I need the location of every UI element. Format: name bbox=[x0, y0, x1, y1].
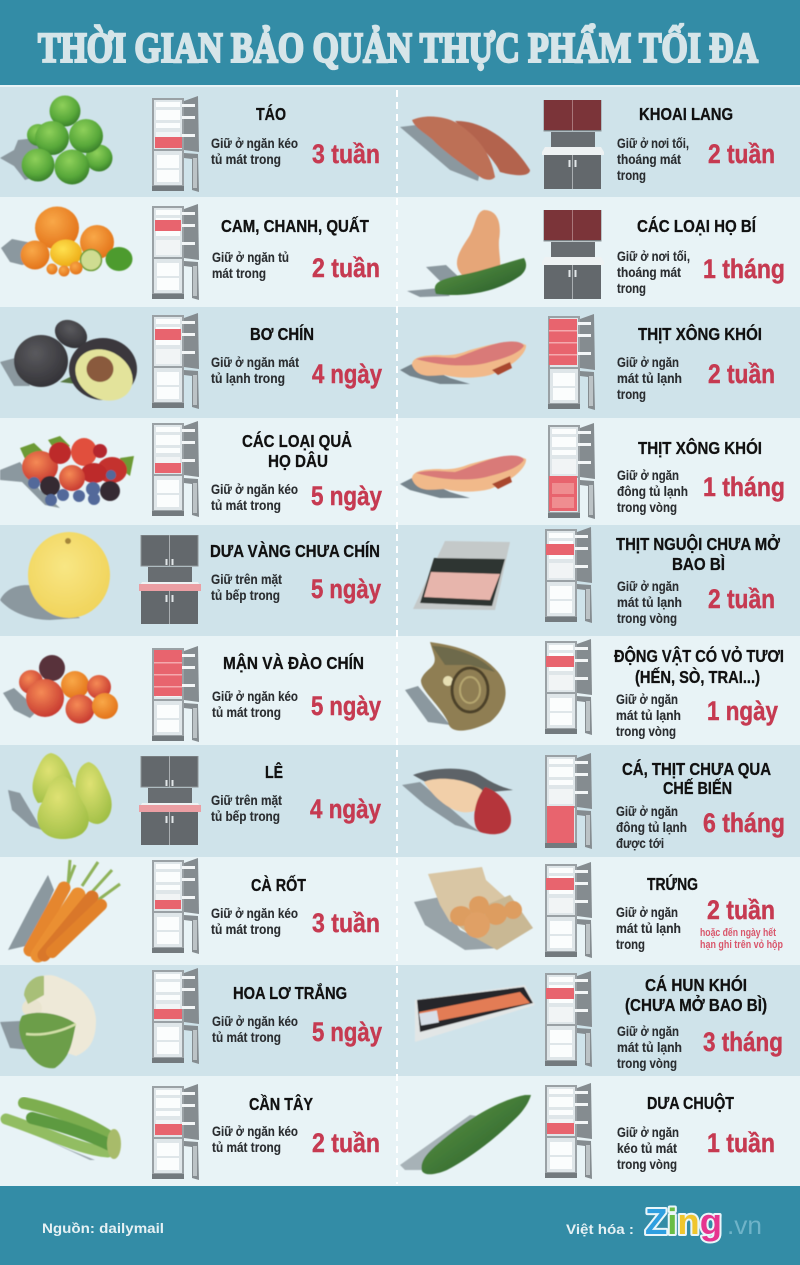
fridge bbox=[152, 96, 199, 192]
cabinet bbox=[139, 535, 201, 624]
cabinet bbox=[542, 210, 604, 299]
storage note: Giữ ở ngăn bbox=[616, 692, 678, 707]
row: cần tây bbox=[6, 1084, 380, 1180]
storage note: mát tủ lạnh bbox=[617, 1040, 682, 1055]
storage note: Giữ ở nơi tối, bbox=[617, 249, 690, 264]
fridge bbox=[152, 1084, 199, 1180]
storage note: Giữ ở ngăn kéo bbox=[211, 482, 298, 497]
storage note: Giữ ở ngăn bbox=[617, 1024, 679, 1039]
storage note: tủ mát trong bbox=[212, 1030, 281, 1045]
icon: melon bbox=[0, 532, 110, 620]
row: mận và đào chín bbox=[3, 646, 381, 742]
storage note: thoáng mát bbox=[617, 265, 681, 280]
duration: 6 tháng bbox=[703, 808, 785, 838]
fridge bbox=[545, 971, 592, 1067]
icon: cucumber bbox=[400, 1095, 531, 1174]
icon: avocados bbox=[0, 314, 142, 411]
storage note: trong vòng bbox=[617, 1056, 677, 1071]
cabinet bbox=[139, 756, 201, 845]
header band bbox=[0, 0, 800, 85]
heading: CÁC LOẠI QUẢ bbox=[242, 430, 352, 451]
storage note bbox=[211, 355, 299, 386]
duration: 3 tuần bbox=[312, 908, 380, 938]
storage note: mát tủ lạnh bbox=[616, 708, 681, 723]
row: các loại họ bí bbox=[407, 210, 785, 299]
heading: BƠ CHÍN bbox=[250, 323, 314, 344]
fridge bbox=[152, 204, 199, 300]
storage note: Giữ ở ngăn mát bbox=[211, 355, 299, 370]
row: các loại quả họ dâu bbox=[0, 421, 382, 517]
row: táo bbox=[0, 96, 380, 192]
fridge bbox=[545, 639, 592, 735]
storage note bbox=[617, 249, 690, 296]
storage note: Giữ ở ngăn kéo bbox=[211, 906, 298, 921]
heading: CÁC LOẠI HỌ BÍ bbox=[637, 215, 757, 236]
storage note: Giữ ở ngăn bbox=[616, 804, 678, 819]
heading: TÁO bbox=[256, 103, 286, 124]
duration: 2 tuần bbox=[708, 139, 775, 169]
storage note: trong bbox=[616, 937, 645, 952]
heading: CÁ HUN KHÓI bbox=[645, 974, 747, 995]
icon: squash and zucchini bbox=[407, 210, 526, 297]
storage note: Giữ ở ngăn kéo bbox=[211, 136, 298, 151]
fridge bbox=[545, 753, 592, 849]
duration: 1 tuần bbox=[707, 1128, 775, 1158]
row: cà rốt bbox=[8, 858, 380, 955]
icon: celery bbox=[6, 1103, 121, 1160]
storage note: Giữ ở ngăn bbox=[617, 355, 679, 370]
storage note bbox=[617, 136, 689, 183]
fridge bbox=[152, 968, 199, 1064]
icon: fish and meat bbox=[402, 769, 513, 834]
storage note: Giữ trên mặt bbox=[211, 793, 282, 808]
icon: oyster bbox=[405, 642, 506, 731]
fridge bbox=[152, 421, 199, 517]
storage note: Giữ ở ngăn kéo bbox=[212, 689, 298, 704]
storage note: được tới bbox=[616, 836, 664, 851]
storage note: Giữ ở ngăn kéo bbox=[212, 1014, 298, 1029]
duration: 5 ngày bbox=[311, 574, 381, 604]
heading: HOA LƠ TRẮNG bbox=[233, 982, 347, 1003]
row: thịt xông khói (ngăn mát) bbox=[400, 314, 775, 410]
heading bbox=[242, 430, 352, 471]
icon: pears bbox=[8, 753, 112, 839]
duration: 5 ngày bbox=[312, 1017, 382, 1047]
heading: DƯA CHUỘT bbox=[647, 1092, 734, 1113]
storage note: mát trong bbox=[212, 266, 266, 281]
icon: apples bbox=[0, 96, 112, 184]
storage note: trong vòng bbox=[617, 1157, 677, 1172]
icon: sweet potatoes bbox=[400, 116, 530, 181]
row: cá, thịt bbox=[402, 753, 785, 851]
duration: 2 tuần bbox=[312, 253, 380, 283]
icon: cauliflower bbox=[0, 975, 96, 1068]
duration: 2 tuần bbox=[312, 1128, 380, 1158]
storage note bbox=[616, 905, 681, 952]
storage note bbox=[211, 482, 298, 513]
storage note: đông tủ lạnh bbox=[617, 484, 688, 499]
logo: zing.vn: Zing bbox=[645, 1201, 722, 1242]
row: động vật có vỏ bbox=[405, 639, 784, 739]
icon: bacon bbox=[400, 342, 526, 384]
duration: 1 ngày bbox=[707, 696, 778, 726]
row: trứng bbox=[414, 862, 783, 958]
storage note: mát tủ lạnh bbox=[616, 921, 681, 936]
storage note: Giữ ở nơi tối, bbox=[617, 136, 689, 151]
storage note: Giữ ở ngăn kéo bbox=[212, 1124, 298, 1139]
duration: 5 ngày bbox=[311, 481, 382, 511]
heading: MẬN VÀ ĐÀO CHÍN bbox=[223, 652, 364, 673]
fridge bbox=[152, 313, 199, 409]
storage note: Giữ ở ngăn bbox=[617, 579, 679, 594]
heading bbox=[625, 974, 767, 1015]
row: thịt xông khói (ngăn đông) bbox=[400, 423, 785, 519]
storage note bbox=[212, 1124, 298, 1155]
storage note bbox=[617, 579, 682, 626]
heading: THỊT XÔNG KHÓI bbox=[638, 437, 762, 458]
heading: TRỨNG bbox=[647, 873, 698, 894]
row: lê bbox=[8, 753, 381, 845]
storage note: tủ mát trong bbox=[211, 498, 281, 513]
storage note: tủ mát trong bbox=[212, 705, 281, 720]
storage note: mát tủ lạnh bbox=[617, 371, 682, 386]
storage note bbox=[616, 804, 687, 851]
fridge bbox=[152, 646, 199, 742]
heading: KHOAI LANG bbox=[639, 104, 733, 124]
heading: BAO BÌ bbox=[672, 553, 725, 574]
duration: 4 ngày bbox=[310, 794, 381, 824]
storage note: tủ mát trong bbox=[212, 1140, 281, 1155]
row: cá hun khói bbox=[415, 971, 783, 1071]
storage note bbox=[212, 1014, 298, 1045]
cabinet bbox=[542, 100, 604, 189]
storage note: Giữ ở ngăn tủ bbox=[212, 250, 289, 265]
row: bơ chín bbox=[0, 313, 382, 411]
storage note: trong vòng bbox=[617, 500, 677, 515]
storage note bbox=[617, 1024, 682, 1071]
fridge bbox=[545, 862, 592, 958]
storage note: Giữ ở ngăn bbox=[617, 468, 679, 483]
icon: citrus bbox=[1, 206, 132, 276]
storage note: tủ bếp trong bbox=[211, 809, 280, 824]
storage note: tủ lạnh trong bbox=[211, 371, 285, 386]
icon: berries bbox=[0, 436, 134, 508]
logo: zing.vn: .vn bbox=[727, 1212, 762, 1240]
heading: DƯA VÀNG CHƯA CHÍN bbox=[210, 540, 380, 561]
heading bbox=[616, 533, 780, 574]
heading: THỊT XÔNG KHÓI bbox=[638, 323, 762, 344]
storage note bbox=[212, 689, 298, 720]
footer band bbox=[0, 1186, 800, 1265]
heading: CẦN TÂY bbox=[249, 1093, 313, 1114]
duration: 3 tháng bbox=[703, 1027, 783, 1057]
storage note bbox=[617, 355, 682, 402]
icon: ham package bbox=[413, 541, 510, 610]
heading: (CHƯA MỞ BAO BÌ) bbox=[625, 994, 767, 1015]
storage note bbox=[212, 250, 289, 281]
storage note: thoáng mát bbox=[617, 152, 681, 167]
storage note bbox=[211, 136, 298, 167]
duration: 3 tuần bbox=[312, 139, 380, 169]
row: khoai lang bbox=[400, 100, 775, 189]
row: dưa vàng bbox=[0, 532, 381, 624]
duration: 5 ngày bbox=[311, 691, 381, 721]
heading: CÀ RỐT bbox=[251, 874, 306, 895]
fridge bbox=[545, 1083, 592, 1179]
duration: 1 tháng bbox=[703, 254, 785, 284]
storage note: kéo tủ mát bbox=[617, 1141, 677, 1156]
storage note: tủ mát trong bbox=[211, 152, 281, 167]
row: thịt nguội bbox=[413, 527, 780, 626]
storage note bbox=[211, 572, 282, 603]
icon: eggs in carton bbox=[414, 867, 533, 950]
storage note: trong bbox=[617, 281, 646, 296]
translator label: Việt hóa : bbox=[566, 1221, 634, 1237]
storage note: Giữ ở ngăn bbox=[617, 1125, 679, 1140]
storage note: trong vòng bbox=[616, 724, 676, 739]
heading bbox=[614, 645, 784, 687]
storage note: Giữ ở ngăn bbox=[616, 905, 678, 920]
storage note: trong vòng bbox=[617, 611, 677, 626]
heading: CHẾ BIẾN bbox=[663, 777, 732, 798]
heading: CAM, CHANH, QUẤT bbox=[221, 215, 369, 236]
source: Nguồn: dailymail bbox=[42, 1220, 164, 1236]
expiry note bbox=[700, 927, 783, 951]
expiry note: hoặc đến ngày hết bbox=[700, 927, 776, 939]
heading: CÁ, THỊT CHƯA QUA bbox=[622, 758, 771, 779]
row: hoa lơ trắng bbox=[0, 968, 382, 1068]
storage note: tủ mát trong bbox=[211, 922, 281, 937]
storage note: tủ bếp trong bbox=[211, 588, 280, 603]
duration: 2 tuần bbox=[708, 584, 775, 614]
fridge bbox=[548, 314, 595, 410]
duration: 2 tuần bbox=[708, 359, 775, 389]
icon: smoked salmon pack bbox=[415, 985, 535, 1042]
fridge bbox=[548, 423, 595, 519]
storage note bbox=[211, 906, 298, 937]
row: cam, chanh, quất bbox=[1, 204, 380, 300]
icon: bacon bbox=[400, 456, 526, 498]
storage note: trong bbox=[617, 168, 646, 183]
heading bbox=[622, 758, 771, 798]
heading: (HẾN, SÒ, TRAI...) bbox=[635, 666, 760, 687]
storage note: mát tủ lạnh bbox=[617, 595, 682, 610]
storage note: đông tủ lạnh bbox=[616, 820, 687, 835]
storage note bbox=[616, 692, 681, 739]
fridge bbox=[152, 858, 199, 954]
duration: 1 tháng bbox=[703, 472, 785, 502]
icon: plums and peaches bbox=[3, 655, 118, 724]
row: dưa chuột bbox=[400, 1083, 775, 1179]
duration: 4 ngày bbox=[312, 359, 382, 389]
fridge bbox=[545, 527, 592, 623]
storage note bbox=[617, 468, 688, 515]
duration: 2 tuần bbox=[707, 895, 775, 925]
storage note: trong bbox=[617, 387, 646, 402]
storage note bbox=[211, 793, 282, 824]
icon: carrots bbox=[8, 860, 120, 955]
logo: zing.vn bbox=[645, 1201, 762, 1242]
heading: LÊ bbox=[265, 761, 283, 782]
heading: HỌ DÂU bbox=[268, 450, 328, 471]
storage note bbox=[617, 1125, 679, 1172]
storage note: Giữ trên mặt bbox=[211, 572, 282, 587]
expiry note: hạn ghi trên vỏ hộp bbox=[700, 939, 783, 951]
